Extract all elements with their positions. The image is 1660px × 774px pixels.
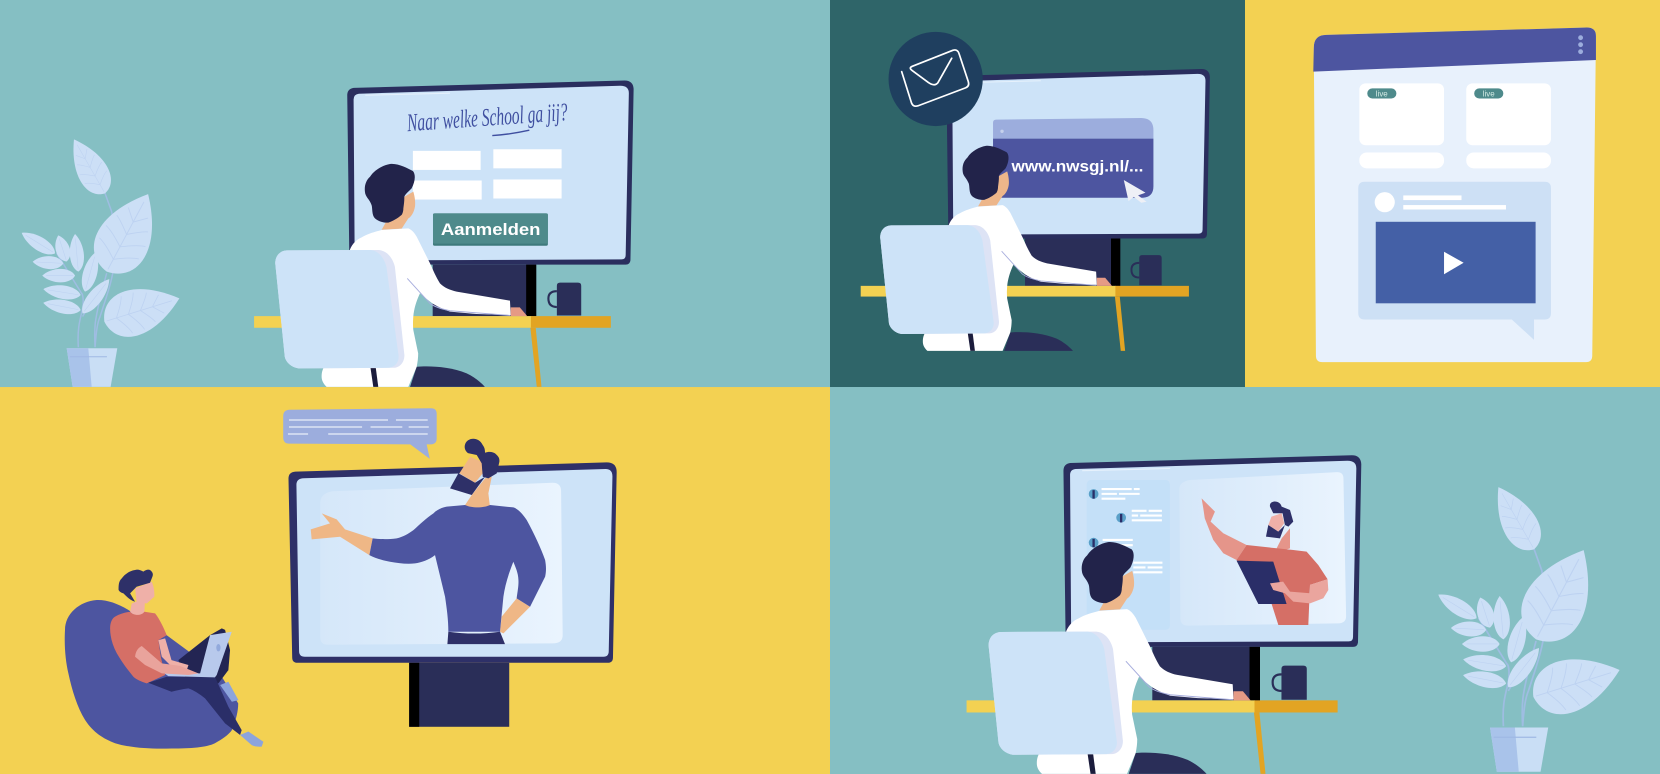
chat column [1087, 480, 1170, 630]
sign-up button [433, 213, 548, 246]
monitor [288, 462, 617, 663]
live card 1: live [1376, 89, 1388, 98]
monitor [347, 80, 634, 265]
video panel [1179, 472, 1346, 626]
person at desk [861, 146, 1189, 351]
live card 2 [1466, 83, 1551, 168]
video post [1358, 182, 1551, 340]
person at desk [254, 164, 611, 387]
person at desk [967, 542, 1338, 774]
browser window with url: www.nwsgj.nl/... [1010, 159, 1143, 176]
student on beanbag [65, 570, 263, 749]
web page [1314, 28, 1596, 362]
icon: email [889, 32, 983, 126]
monitor [946, 69, 1210, 239]
icon: cursor [1124, 180, 1147, 203]
speech bubble [283, 408, 437, 459]
sign-up button: Aanmelden [441, 221, 540, 239]
icon: potted plant [1434, 479, 1627, 772]
live card 2: live [1483, 89, 1495, 98]
monitor [1063, 455, 1361, 647]
icon: potted plant [18, 132, 186, 387]
panel: link scene [830, 0, 1245, 387]
browser window with url [993, 118, 1153, 198]
panel: live page [1245, 0, 1660, 387]
handwritten heading [405, 98, 569, 137]
sign-up form fields [413, 149, 562, 200]
page header bar [1313, 28, 1596, 72]
panel: sign-up scene [0, 0, 830, 387]
panel: online lesson scene [830, 387, 1660, 774]
teacher [1202, 498, 1328, 625]
live card 1 [1359, 83, 1444, 168]
presenter [311, 439, 546, 644]
panel: lecture scene [0, 387, 830, 774]
handwritten heading: Naar welke School ga jij? [405, 98, 569, 137]
monitor stand [409, 663, 509, 727]
